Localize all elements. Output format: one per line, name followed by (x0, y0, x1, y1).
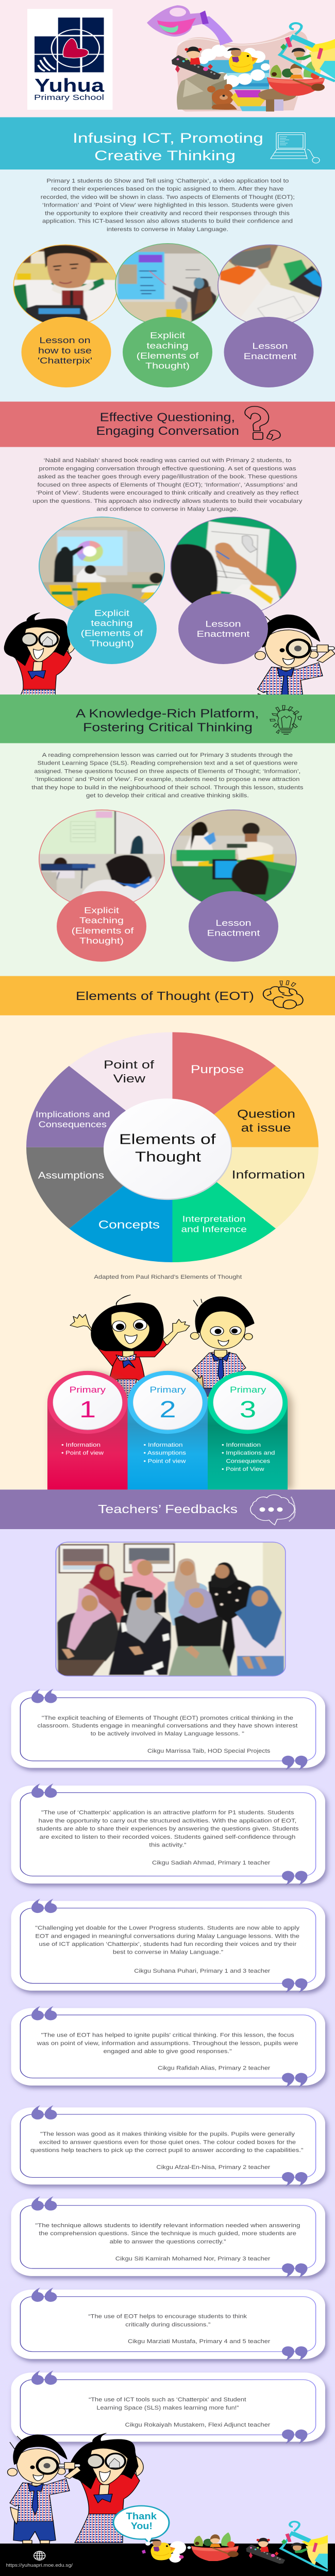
panel: Infusing ICT section (0, 170, 335, 402)
label circle: Lesson Enactment: Enactment (197, 629, 250, 639)
icon: question marks (245, 406, 280, 440)
column: Primary 3: Primary (230, 1385, 266, 1395)
label circle: Explicit teaching (67, 594, 157, 664)
label circle: Explicit Teaching: Explicit (84, 906, 120, 916)
speech bubble: Thank You: You! (131, 2520, 153, 2531)
school logo (27, 9, 112, 110)
paragraph (31, 752, 304, 799)
panel: Elements of Thought section (0, 1015, 335, 1489)
photo: students with tablets at green table (171, 810, 296, 909)
school logo: Yuhua (35, 75, 105, 96)
paragraph: Student Learning Space (SLS). Reading comprehension text and a set of questions were (37, 760, 297, 766)
label circle: Explicit teaching: Explicit (94, 608, 130, 618)
paragraph: focused on three aspects of Elements of Thought (EOT); ‘Information’, ‘Assumptions’ and (37, 482, 297, 488)
paragraph: A reading comprehension lesson was carried out for Primary 3 students through the (42, 752, 293, 758)
quote card: Cikgu Sadiah Ahmad: students are able to share their experiences by answering the questions given. Students (36, 1826, 298, 1832)
photo: teacher at whiteboard (115, 244, 221, 326)
photo: group of teachers (56, 1543, 286, 1676)
quote card: Cikgu Rafidah Alias: was on point of view, information and assumptions. Throughout the lesson, pupils were (37, 2040, 298, 2046)
school logo: Primary School (34, 93, 104, 102)
paragraph: interests to converse in Malay Language. (107, 226, 228, 232)
quote card: Cikgu Marrissa Taib (11, 1689, 325, 1770)
column: Primary 2: Primary (149, 1385, 187, 1395)
paragraph: recorded, the video will be shown in class. Two aspects of Elements of Thought (EOT); (41, 194, 295, 200)
label circle: Lesson on how to use Chatterpix: how to use (38, 346, 92, 355)
photo: student writing on worksheet (171, 517, 296, 616)
heading banner: Teachers' Feedbacks (0, 1489, 335, 1529)
label circle: Lesson Enactment: Enactment (207, 928, 260, 938)
heading banner: Teachers' Feedbacks: Teachers’ Feedbacks (98, 1502, 238, 1516)
photo: boy using tablet (14, 245, 117, 326)
label circle: Explicit Teaching: (Elements of (72, 926, 134, 936)
icon: brain (263, 980, 303, 1009)
paragraph: asked as the teacher goes through every page/illustration of the book. These questions (38, 473, 297, 480)
label circle: Explicit teaching: Thought) (90, 638, 134, 649)
panel: teachers' feedback section (0, 1529, 335, 2544)
cartoon: boy with magnifying glass (255, 614, 335, 694)
illustration: hanger (281, 2521, 328, 2571)
heading banner: Effective Questioning: Effective Questioning, (100, 410, 235, 424)
heading banner: Effective Questioning (0, 402, 335, 447)
paragraph: get to develop their critical and creative thinking skills. (86, 792, 249, 799)
label circle: Explicit Teaching (57, 891, 146, 962)
label circle: Explicit teaching: (Elements of (81, 629, 143, 638)
quote card: Cikgu Marrissa Taib: "The explicit teaching of Elements of Thought (EOT) promotes critical thinking in the (42, 1715, 293, 1721)
quote card: Cikgu Rokaiyah Mustakem: Learning Space (SLS) makes learning more fun!” (96, 2404, 239, 2411)
label circle: Lesson Enactment: Lesson (205, 619, 241, 629)
footer (0, 2506, 335, 2576)
cartoon: girl with binoculars (69, 2433, 143, 2543)
pie chart: eight elements of thought: Implications and (36, 1110, 110, 1120)
column: Primary 2 (128, 1371, 208, 1489)
quote card: Cikgu Suhana Puhari: EOT and engaged in meaningful conversations during Malay Language lessons. With the (35, 1933, 299, 1939)
quote card: Cikgu Afzal-En-Nisa: excited to answer questions even for those quiet ones. The colour coded boxes for the (39, 2139, 296, 2145)
quote card: Cikgu Rokaiyah Mustakem (11, 2370, 325, 2444)
heading banner: Knowledge-Rich Platform: A Knowledge-Rich Platform, (76, 707, 259, 720)
quote card: Cikgu Marziati Mustafa: critically during discussions.” (125, 2321, 210, 2328)
column: Primary 3: 3 (240, 1397, 256, 1423)
column: Primary 1: • Point of view (61, 1450, 104, 1456)
column: Primary 3: • Implications and (222, 1450, 275, 1456)
label circle: Lesson Enactment (224, 317, 313, 387)
label circle: Explicit teaching (123, 317, 212, 387)
panel: Knowledge-Rich Platform section (0, 743, 335, 976)
pie chart: eight elements of thought (26, 1032, 319, 1262)
quote card: Cikgu Rokaiyah Mustakem: “The use of ICT tools such as ‘Chatterpix’ and Student (89, 2396, 246, 2403)
quote card: Cikgu Suhana Puhari (11, 1899, 325, 1993)
label circle: Explicit teaching: Explicit (150, 331, 186, 341)
label circle: Lesson Enactment: Enactment (244, 351, 297, 361)
pie centre: Elements of Thought: Elements of (119, 1131, 216, 1147)
panel: header with school logo and illustration (0, 0, 335, 117)
paragraph: the opportunity to explore their creativity and record their responses through this (45, 210, 290, 216)
cartoon: boy with magnifying glass (7, 2435, 81, 2544)
quote card: Cikgu Sadiah Ahmad: Cikgu Sadiah Ahmad, Primary 1 teacher (152, 1859, 270, 1866)
column: Primary 1: Primary (70, 1385, 106, 1395)
paragraph: application. This ICT-based lesson also allows students to build their confidence and (42, 218, 293, 224)
pie chart: eight elements of thought: Concepts (98, 1218, 160, 1231)
icon: globe (34, 2551, 45, 2560)
illustration: remote with girl (246, 2538, 285, 2564)
paragraph: promote engaging conversation through effective questioning. A set of questions was (39, 465, 296, 472)
cartoon: girl waving (70, 1295, 190, 1398)
heading banner: Knowledge-Rich Platform: Fostering Critical Thinking (83, 721, 253, 734)
icon: light bulb (270, 705, 301, 734)
paragraph: upon the questions. This approach also indirectly allows students to build their vocabulary (32, 498, 303, 504)
paragraph: ‘Implications’ and ‘Point of View’. For example, students need to propose a new attraction (35, 776, 299, 783)
icon: speech bubble (250, 1495, 295, 1525)
quote card: Cikgu Marrissa Taib: Cikgu Marrissa Taib, HOD Special Projects (147, 1748, 270, 1754)
quote card: Cikgu Rokaiyah Mustakem: Cikgu Rokaiyah Mustakem, Flexi Adjunct teacher (125, 2421, 270, 2428)
quote card: Cikgu Siti Kamirah Mohamed Nor: Cikgu Siti Kamirah Mohamed Nor, Primary 3 teacher (115, 2256, 270, 2262)
label circle: Explicit teaching: teaching (91, 618, 133, 628)
label circle: Explicit Teaching: Teaching (79, 916, 124, 926)
quote card: Cikgu Rafidah Alias: engaged and able to give good responses." (104, 2048, 232, 2055)
photo: reading lesson in classroom (39, 810, 164, 909)
pie chart: eight elements of thought: Information (232, 1168, 305, 1181)
label circle: Lesson Enactment (189, 891, 278, 962)
cartoon: girl with binoculars (4, 612, 75, 694)
quote card: Cikgu Siti Kamirah Mohamed Nor: able to answer the questions correctly.” (110, 2239, 226, 2245)
pie chart: eight elements of thought: Point of (104, 1059, 155, 1071)
quote card: Cikgu Sadiah Ahmad (11, 1784, 325, 1885)
paragraph: record their experiences based on the topic assigned to them. After they have (52, 185, 283, 192)
column: Primary 2: • Point of view (143, 1458, 186, 1464)
website link: https://yuhuapri.moe.edu.sg/ (6, 2563, 73, 2568)
pie centre: Elements of Thought: Thought (135, 1148, 201, 1164)
quote card: Cikgu Marrissa Taib: to be actively involved in Malay Language lessons. " (91, 1731, 244, 1737)
quote card: Cikgu Rafidah Alias: Cikgu Rafidah Alias, Primary 2 teacher (158, 2065, 270, 2071)
pie chart: eight elements of thought: Question (237, 1108, 295, 1121)
pie chart: eight elements of thought: Assumptions (38, 1170, 104, 1181)
pie centre: Elements of Thought (104, 1098, 232, 1200)
photo: teacher pointing at projected wheel (39, 517, 165, 619)
quote card: Cikgu Siti Kamirah Mohamed Nor: the comprehension questions. Since the technique is much guided, more students are (39, 2230, 296, 2236)
paragraph (41, 178, 295, 232)
quote card: Cikgu Afzal-En-Nisa (11, 2105, 325, 2187)
heading banner: Effective Questioning: Engaging Conversation (96, 424, 239, 437)
pie chart: eight elements of thought: Interpretation (182, 1214, 246, 1224)
column: Primary 1 (47, 1371, 128, 1489)
quote card: Cikgu Suhana Puhari: use of ICT application ‘Chatterpix’, students had fun recording their voices and try their (39, 1941, 296, 1947)
quote card: Cikgu Suhana Puhari: "Challenging yet doable for the Lower Progress students. Students are now able to apply (35, 1925, 300, 1931)
label circle: Lesson Enactment: Lesson (252, 341, 288, 351)
label circle: Lesson on how to use Chatterpix: 'Chatterpix' (38, 356, 92, 366)
quote card: Cikgu Rafidah Alias: "The use of EOT has helped to ignite pupils' critical thinking. For this lesson, the focus (41, 2032, 294, 2038)
heading banner: Knowledge-Rich Platform (0, 694, 335, 743)
label circle: Lesson Enactment: Lesson (215, 918, 252, 928)
paragraph: that they hope to build in the neighbourhood of their school. Through this lesson, students (31, 784, 304, 791)
pie chart: eight elements of thought: View (113, 1073, 146, 1085)
column: Primary 3: • Information (222, 1442, 261, 1448)
column: Primary 2: • Assumptions (143, 1450, 186, 1456)
column: Primary 2: • Information (143, 1442, 182, 1448)
paragraph: ‘Information’ and ‘Point of View’ were highlighted in this lesson. Students were given (42, 202, 293, 208)
paragraph: ‘Point of View’. Students were encouraged to think critically and creatively as they reflect (36, 490, 299, 496)
panel: Effective Questioning section (0, 447, 335, 694)
icon: laptop (271, 132, 320, 163)
column: Primary 1: 1 (79, 1397, 96, 1423)
column: Primary 3 (208, 1371, 288, 1489)
quote card: Cikgu Afzal-En-Nisa: "The lesson was good as it makes thinking visible for the pupils. Pupils were generally (40, 2131, 295, 2137)
pie chart: eight elements of thought: and Inference (181, 1224, 247, 1234)
heading banner: Elements of Thought (EOT) (0, 976, 335, 1015)
label circle: Lesson Enactment (178, 594, 268, 664)
label circle: Explicit teaching: Thought) (145, 361, 190, 371)
illustration: duck with bubbles (142, 2539, 191, 2563)
caption: Adapted from Paul Richard’s Elements of Thought (94, 1274, 242, 1280)
quote card: Cikgu Suhana Puhari: best to converse in Malay Language.” (113, 1949, 223, 1955)
label circle: Explicit teaching: (Elements of (137, 351, 199, 361)
pie chart: eight elements of thought: at issue (241, 1122, 291, 1134)
quote card: Cikgu Marziati Mustafa: Cikgu Marziati Mustafa, Primary 4 and 5 teacher (128, 2338, 270, 2345)
quote card: Cikgu Sadiah Ahmad: have the opportunity to carry out the structured activities. With the application of EOT, (39, 1818, 296, 1824)
illustration: salad bowl (191, 2532, 239, 2561)
photo: student with tablet and worksheet (218, 245, 322, 327)
paragraph: ‘Nabil and Nabilah’ shared book reading was carried out with Primary 2 students, to (44, 457, 291, 464)
heading banner: Elements of Thought (EOT): Elements of Thought (EOT) (76, 989, 254, 1003)
quote card: Cikgu Marziati Mustafa (11, 2287, 325, 2361)
pie chart: eight elements of thought: Purpose (191, 1063, 244, 1076)
quote card: Cikgu Afzal-En-Nisa: Cikgu Afzal-En-Nisa, Primary 2 teacher (156, 2164, 270, 2170)
paragraph: Primary 1 students do Show and Tell using ‘Chatterpix’, a video application tool to (46, 178, 289, 184)
heading banner: Infusing ICT (0, 117, 335, 170)
quote card: Cikgu Marrissa Taib: classroom. Students engage in meaningful conversations and they have shown interest (37, 1723, 298, 1729)
paragraph: assigned. These questions focused on three aspects of Elements of Thought; ‘Information’, (34, 768, 300, 774)
quote card: Cikgu Suhana Puhari: Cikgu Suhana Puhari, Primary 1 and 3 teacher (134, 1968, 270, 1974)
quote card: Cikgu Marziati Mustafa: “The use of EOT helps to encourage students to think (88, 2313, 247, 2319)
quote card: Cikgu Afzal-En-Nisa: questions help teachers to pick up the correct pupil to answer according to the capabilities." (30, 2147, 304, 2154)
pie chart: eight elements of thought: Consequences (39, 1120, 107, 1130)
column: Primary 1: • Information (61, 1442, 100, 1448)
column: Primary 3: • Point of View (222, 1466, 264, 1472)
quote card: Cikgu Sadiah Ahmad: "The use of ‘Chatterpix’ application is an attractive platform for P1 students. Students (41, 1809, 294, 1816)
heading banner: Infusing ICT: Infusing ICT, Promoting (73, 130, 263, 146)
quote card: Cikgu Sadiah Ahmad: are excited to listen to their recorded voices. Students gained self-confidence through (40, 1834, 295, 1840)
paragraph (32, 457, 303, 512)
speech bubble: Thank You (113, 2506, 169, 2544)
illustration: potion and toys collage (147, 5, 335, 112)
speech bubble: Thank You: Thank (126, 2510, 157, 2521)
paragraph: and confidence to converse in Malay Language. (96, 506, 239, 512)
label circle: Explicit Teaching: Thought) (79, 936, 124, 946)
label circle: Explicit teaching: teaching (146, 341, 189, 351)
column shadow (52, 1372, 292, 1489)
quote card: Cikgu Siti Kamirah Mohamed Nor (11, 2196, 325, 2278)
cartoon: boy standing (191, 1297, 254, 1396)
column: Primary 2: 2 (159, 1397, 176, 1423)
quote card: Cikgu Siti Kamirah Mohamed Nor: "The technique allows students to identify relevant information needed when answering (35, 2222, 300, 2228)
quote card: Cikgu Sadiah Ahmad: this activity.” (149, 1842, 186, 1848)
heading banner: Infusing ICT: Creative Thinking (94, 148, 236, 163)
label circle: Lesson on how to use Chatterpix (22, 317, 111, 387)
column: Primary 3: Consequences (226, 1458, 270, 1464)
quote card: Cikgu Rafidah Alias (11, 2006, 325, 2087)
label circle: Lesson on how to use Chatterpix: Lesson on (39, 335, 91, 346)
